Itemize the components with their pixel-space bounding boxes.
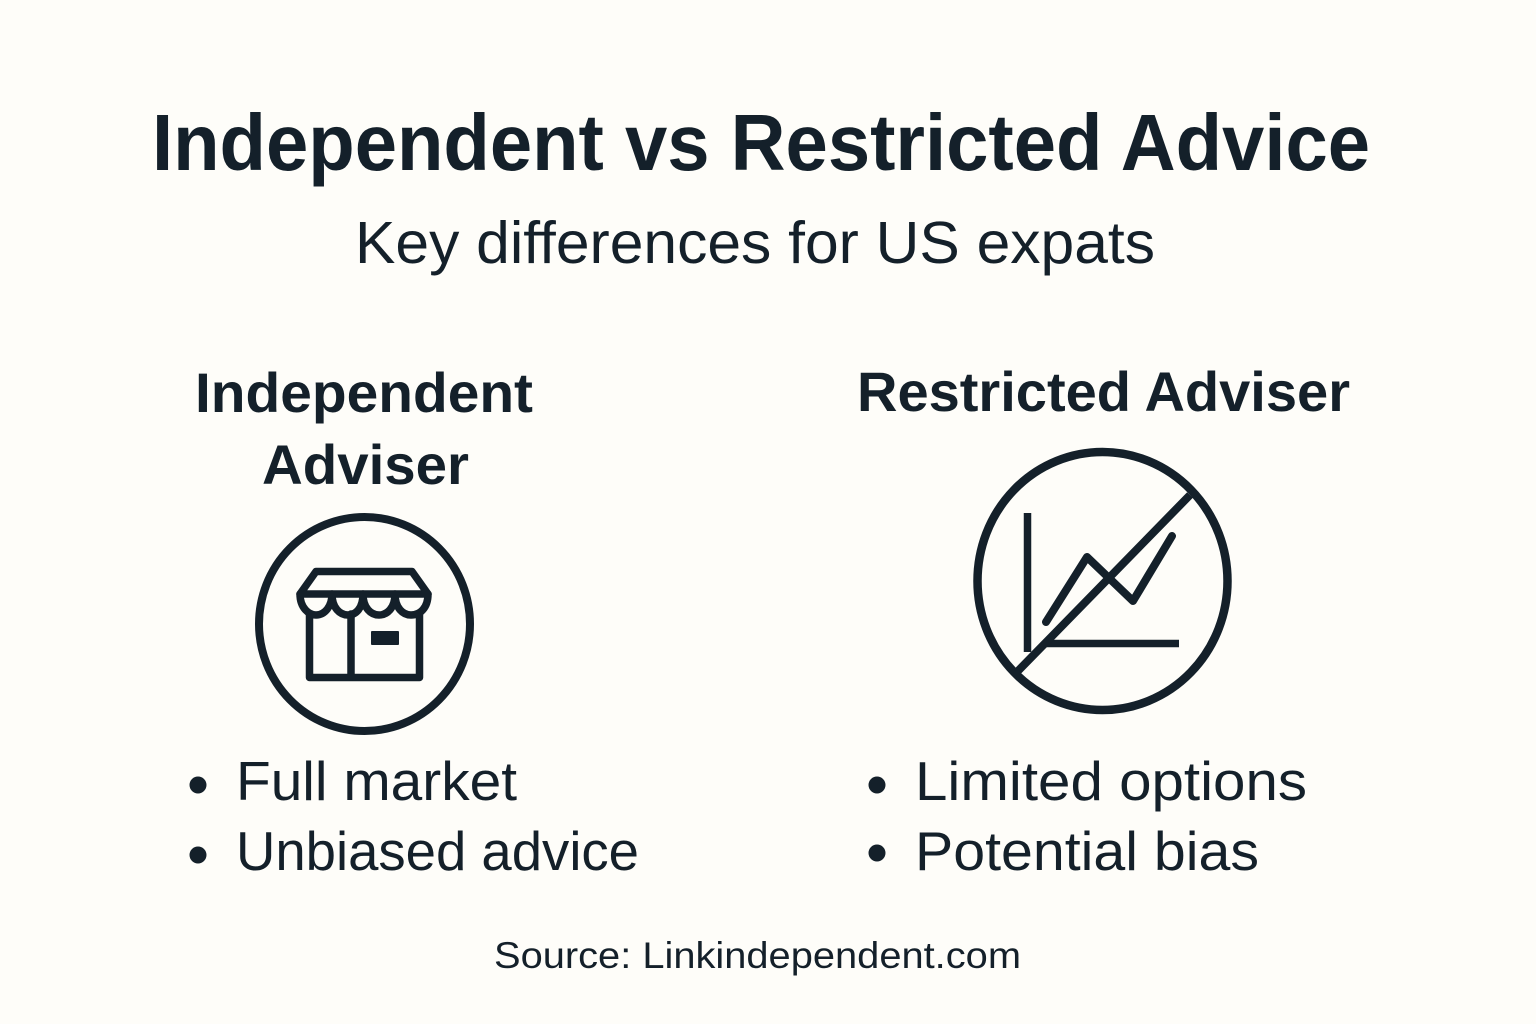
bullet list: restricted adviser — [868, 750, 1307, 882]
bullet list: independent adviser: Unbiased advice — [236, 820, 639, 882]
bullet list: restricted adviser: Limited options — [915, 750, 1307, 812]
bullet list: independent adviser — [190, 750, 639, 882]
source note: Source: Linkindependent.com — [494, 935, 1021, 976]
panel: independent adviser — [190, 361, 639, 882]
heading: independent adviser: Independent — [195, 361, 533, 424]
panel: restricted adviser — [857, 360, 1350, 882]
icon: storefront in circle — [259, 517, 470, 731]
title: Independent vs Restricted Advice — [152, 98, 1370, 187]
heading: independent adviser: Adviser — [262, 433, 469, 496]
subtitle: Key differences for US expats — [355, 210, 1155, 276]
icon: crossed-out line chart in circle — [978, 452, 1228, 710]
heading: restricted adviser: Restricted Adviser — [857, 360, 1350, 423]
bullet list: independent adviser: Full market — [236, 750, 517, 812]
heading: independent adviser — [195, 361, 533, 496]
bullet list: restricted adviser: Potential bias — [915, 820, 1259, 882]
